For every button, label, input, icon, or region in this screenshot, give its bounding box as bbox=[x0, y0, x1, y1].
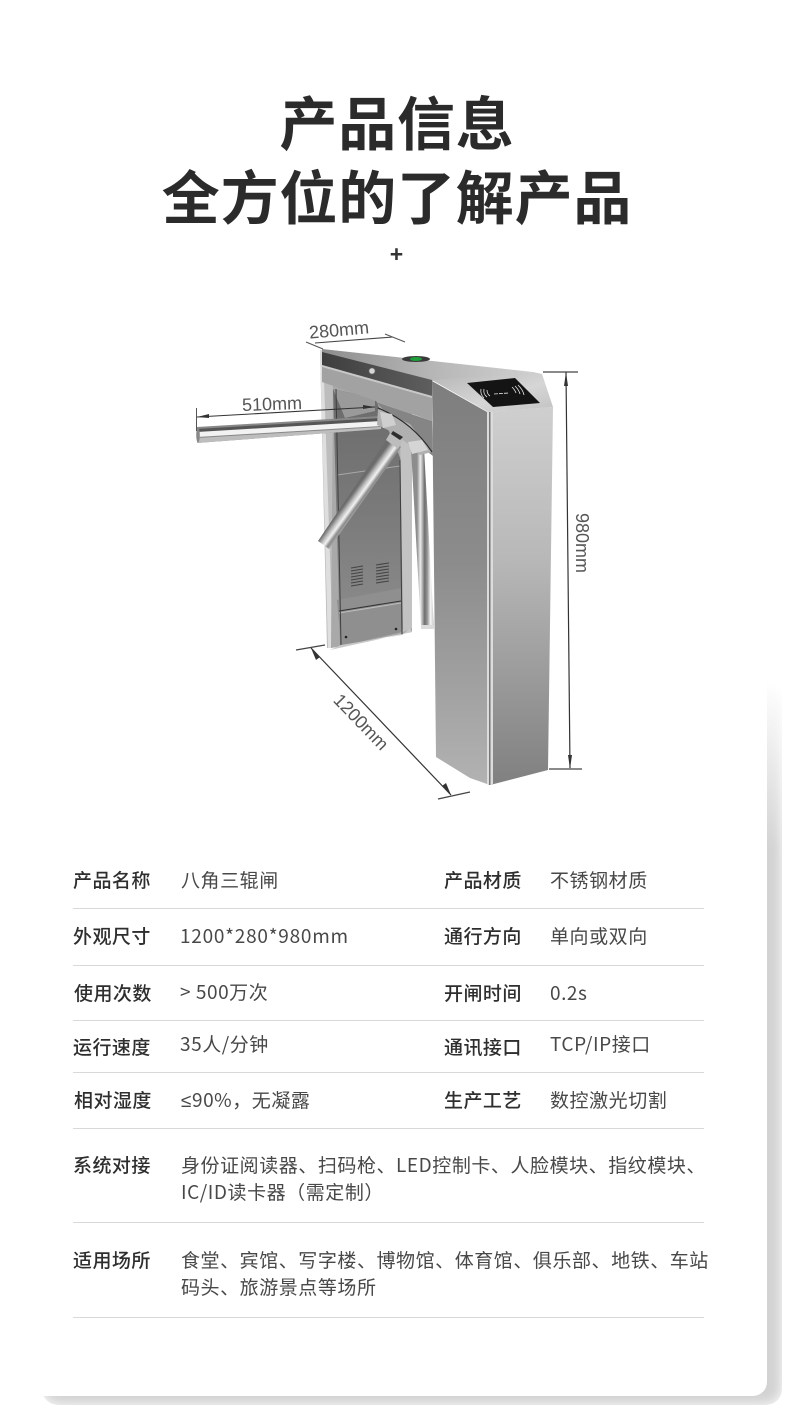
product diagram: turnstile bbox=[196, 317, 592, 800]
dimension: 1200mm bbox=[296, 645, 470, 799]
row: 相对湿度: 数控激光切割 bbox=[550, 1086, 667, 1113]
dimension: 510mm: 510mm bbox=[242, 393, 302, 415]
turnstile arms bbox=[196, 408, 434, 629]
main post bbox=[432, 372, 553, 785]
row: 使用次数 bbox=[74, 978, 587, 1006]
row: 相对湿度: ≤90%，无凝露 bbox=[181, 1086, 310, 1113]
row: 运行速度: 35人/分钟 bbox=[180, 1030, 269, 1057]
row: 外观尺寸 bbox=[73, 922, 648, 949]
back post bbox=[320, 350, 412, 650]
plus mark: + bbox=[390, 241, 403, 267]
row: 系统对接: 系统对接 bbox=[73, 1151, 151, 1178]
row: 适用场所 bbox=[73, 1246, 709, 1300]
row: 产品名称: 不锈钢材质 bbox=[550, 866, 648, 893]
row: 系统对接: 身份证阅读器、扫码枪、LED控制卡、人脸模块、指纹模块、 bbox=[181, 1151, 706, 1178]
row: 适用场所: 码头、旅游景点等场所 bbox=[181, 1273, 377, 1300]
row: 运行速度: TCP/IP接口 bbox=[550, 1030, 651, 1057]
row: 外观尺寸: 1200*280*980mm bbox=[180, 922, 349, 949]
row: 使用次数: > 500万次 bbox=[180, 978, 268, 1005]
row: 运行速度: 运行速度 bbox=[73, 1033, 151, 1060]
row: 相对湿度: 生产工艺 bbox=[444, 1086, 522, 1113]
spec table bbox=[73, 866, 709, 1318]
row: 运行速度 bbox=[73, 1030, 651, 1060]
row: 系统对接 bbox=[73, 1151, 706, 1205]
row: 相对湿度 bbox=[74, 1086, 667, 1113]
title: 产品信息 bbox=[279, 78, 515, 162]
dimension: 980mm: 980mm bbox=[572, 513, 592, 573]
row: 产品名称: 产品材质 bbox=[444, 866, 522, 893]
card shadow bbox=[44, 712, 782, 1405]
dimension: 280mm bbox=[306, 317, 405, 349]
dimension: 510mm bbox=[196, 393, 375, 431]
dimension: 980mm bbox=[543, 372, 592, 769]
row: 外观尺寸: 单向或双向 bbox=[550, 922, 648, 949]
row: 使用次数: 0.2s bbox=[550, 979, 587, 1006]
row: 外观尺寸: 通行方向 bbox=[444, 922, 522, 949]
row: 运行速度: 通讯接口 bbox=[444, 1033, 522, 1060]
dimension: 280mm: 280mm bbox=[308, 317, 370, 343]
vent slots bbox=[351, 563, 389, 586]
top beam bbox=[322, 349, 533, 456]
title bbox=[162, 78, 632, 236]
row: 产品名称: 产品名称 bbox=[73, 866, 151, 893]
row: 产品名称: 八角三辊闸 bbox=[181, 866, 279, 893]
icon: contactless reader symbol bbox=[481, 385, 524, 398]
row: 适用场所: 食堂、宾馆、写字楼、博物馆、体育馆、俱乐部、地铁、车站 bbox=[181, 1246, 709, 1273]
title: 全方位的了解产品 bbox=[162, 152, 632, 236]
row: 外观尺寸: 外观尺寸 bbox=[73, 922, 151, 949]
row: 适用场所: 适用场所 bbox=[73, 1246, 151, 1273]
row: 产品名称 bbox=[73, 866, 648, 893]
row: 使用次数: 使用次数 bbox=[74, 979, 152, 1006]
row: 使用次数: 开闸时间 bbox=[444, 979, 522, 1006]
dimension: 1200mm: 1200mm bbox=[329, 690, 393, 754]
row: 相对湿度: 相对湿度 bbox=[74, 1086, 152, 1113]
row: 系统对接: IC/ID读卡器（需定制） bbox=[181, 1178, 384, 1205]
